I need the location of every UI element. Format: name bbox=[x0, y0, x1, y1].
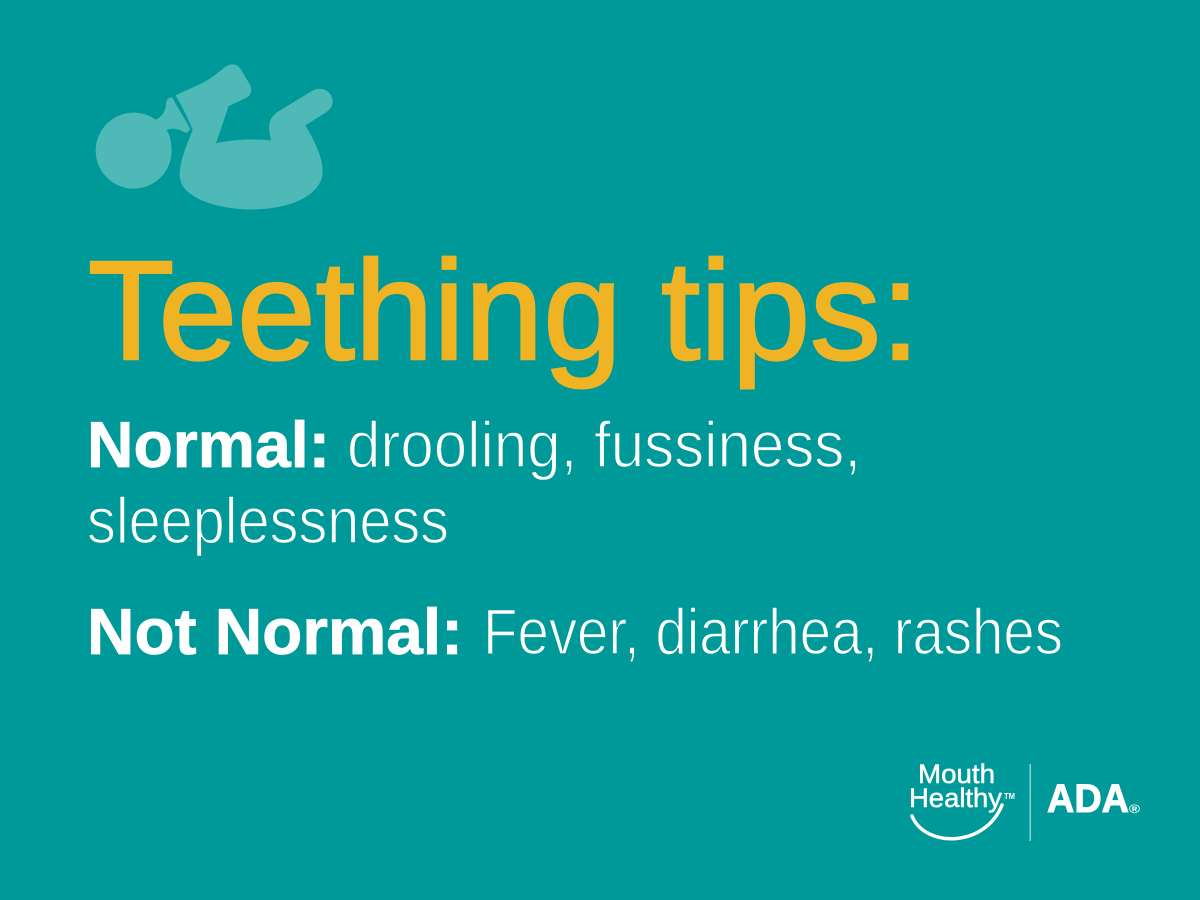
title: Teething tips: bbox=[88, 231, 920, 389]
divider bbox=[1030, 764, 1031, 841]
logo wordmark: Healthy: Healthy bbox=[909, 783, 1003, 813]
smile arc bbox=[912, 805, 1002, 839]
registered mark: ® bbox=[1129, 802, 1140, 816]
text block: normal symptoms bbox=[87, 408, 861, 557]
not normal symptoms: Fever, diarrhea, rashes bbox=[483, 595, 1063, 668]
logo wordmark: ADA: ADA bbox=[1047, 777, 1129, 821]
label: not normal: Not Normal: bbox=[87, 595, 463, 668]
normal symptoms line one: drooling, fussiness, bbox=[347, 408, 861, 481]
logo: Mouth Healthy and ADA bbox=[909, 759, 1140, 841]
label: normal: Normal: bbox=[87, 408, 330, 481]
logo wordmark: Mouth: Mouth bbox=[918, 759, 995, 789]
text block: not normal symptoms bbox=[87, 595, 1063, 668]
normal symptoms line two: sleeplessness bbox=[87, 484, 449, 557]
icon: baby drinking from a bottle bbox=[96, 64, 333, 209]
trademark: TM bbox=[1004, 792, 1015, 801]
